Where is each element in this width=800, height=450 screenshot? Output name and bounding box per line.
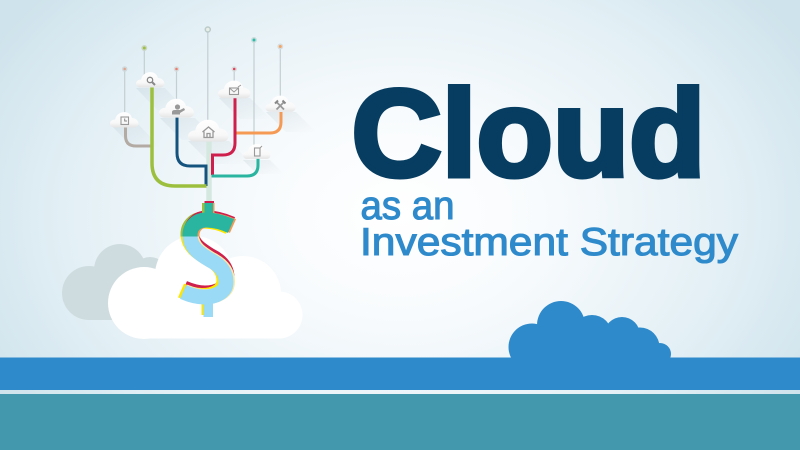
blue band [0,358,800,390]
icon cloud: mail [218,81,250,98]
blue cloud on horizon [508,301,671,370]
stem lines and dots [123,27,282,145]
cloud tree diagram [110,27,316,203]
main dollar curve upper [182,212,234,236]
icon cloud: phone [243,144,270,159]
icon cloud: person [159,99,194,118]
icon cloud: tools [266,96,296,112]
offset colour layers upper [180,210,236,236]
subtitle: as an: as an [360,184,454,228]
icon: dollar sign [181,201,233,317]
grey background cloud [62,244,169,320]
top stem [202,201,214,217]
cloud drop shadows [111,88,316,174]
white foreground cloud [108,236,302,339]
title: Cloud: Cloud [352,66,706,203]
coloured pipes [126,86,281,203]
icon cloud: search [136,72,164,87]
offset colour layers lower [181,216,232,296]
bottom stem [202,302,213,317]
subtitle: Investment Strategy: Investment Strategy [360,221,739,264]
icon cloud: home [188,120,228,142]
icon cloud: clock box [110,112,138,127]
main dollar curve lower [183,220,231,297]
teal band [0,394,800,450]
